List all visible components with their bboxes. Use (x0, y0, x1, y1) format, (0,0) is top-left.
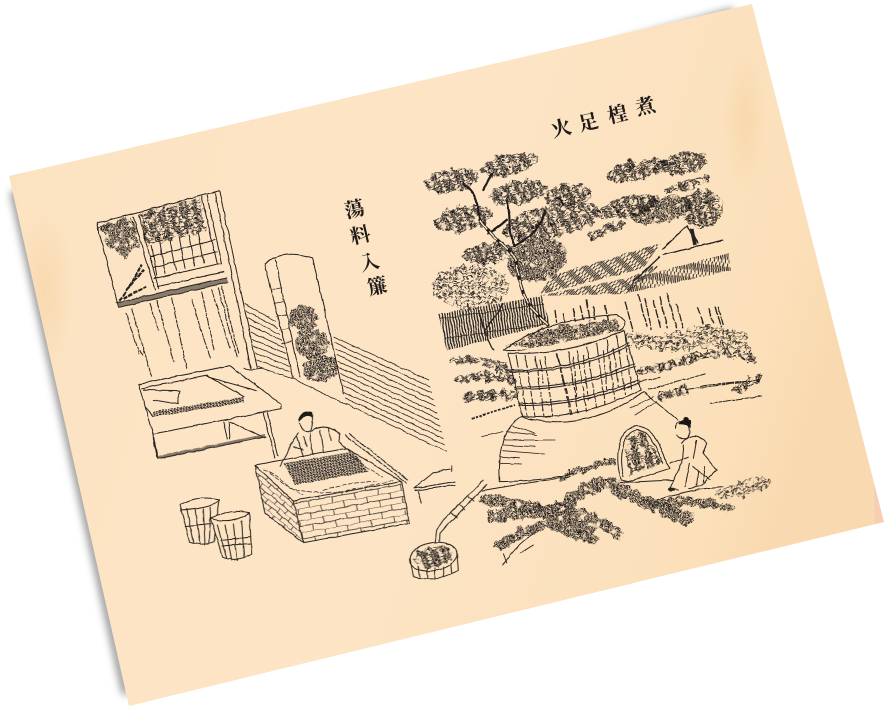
caption: 蕩料入簾: 入 (357, 249, 382, 276)
caption: 蕩料入簾: 料 (348, 222, 373, 249)
background foliage (586, 149, 722, 242)
window with lattice and pine (97, 191, 262, 370)
woven fence (438, 296, 549, 351)
kiln fire opening (618, 426, 670, 482)
ground contour strokes (482, 477, 723, 565)
caption: 煮楻足火 (549, 93, 659, 142)
wooden steaming vat (503, 315, 641, 417)
scene: pouring pulp into the mould (97, 191, 487, 579)
wooden buckets (180, 498, 252, 560)
fence streaks (555, 293, 723, 332)
paper shadows (10, 8, 736, 694)
slatted wall (245, 304, 447, 452)
brush strokes left of kiln (472, 405, 515, 418)
brush right of vat (640, 352, 758, 397)
caption: 煮楻足火: 火 (549, 116, 574, 142)
side bench (414, 466, 455, 503)
kiln (482, 392, 677, 482)
grass tuft right (714, 473, 773, 504)
thatched roof (538, 226, 731, 296)
shrubs behind vat (625, 325, 752, 353)
pulp tub (407, 539, 459, 579)
caption: 蕩料入簾: 蕩 (342, 196, 367, 223)
bamboo pipe (435, 480, 487, 545)
caption: 蕩料入簾: 簾 (365, 273, 390, 300)
brush left of vat (455, 360, 514, 398)
caption: 煮楻足火: 煮 (633, 93, 659, 120)
pine trunk and branches (463, 173, 563, 325)
pine canopy (422, 147, 604, 288)
worker at the vat (280, 411, 350, 467)
small tree (431, 265, 509, 350)
drying table with paper stack (138, 366, 281, 459)
arched gateway with shrub (265, 254, 343, 393)
brick vat (255, 434, 409, 543)
stoker figure (620, 416, 717, 491)
wall streaks (126, 287, 238, 377)
caption: 煮楻足火: 足 (576, 109, 601, 136)
caption: 煮楻足火: 楻 (605, 101, 630, 128)
foreground grass mound (487, 462, 730, 545)
reed strokes right (640, 374, 762, 403)
scene: pine, thatched roof and fence (422, 147, 752, 353)
scene: steaming vat on a kiln (455, 315, 773, 565)
caption: 蕩料入簾 (342, 196, 390, 300)
